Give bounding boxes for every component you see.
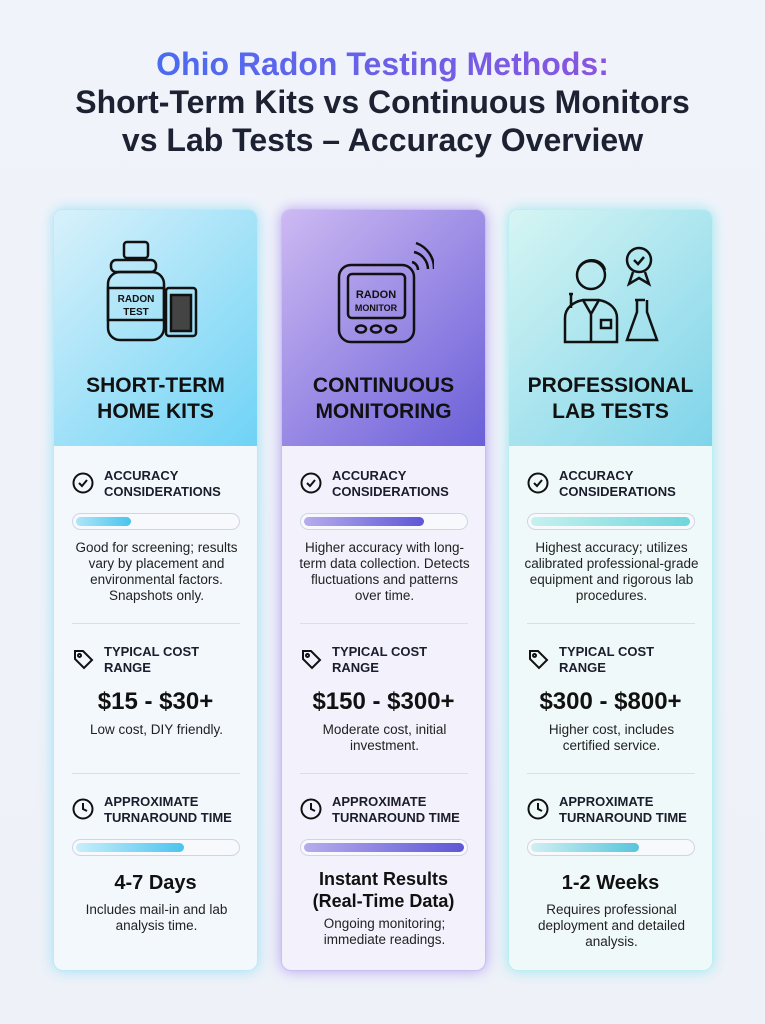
- cost section: $300 - $800+: [539, 688, 682, 715]
- turnaround section: 1-2 Weeks: [562, 872, 659, 894]
- accuracy section: Highest accuracy; utilizes calibrated professional-grade equipment and rigorous lab procedures.: [524, 540, 699, 603]
- accuracy section: CONSIDERATIONS: [559, 484, 676, 499]
- accuracy section: ACCURACY: [104, 468, 178, 483]
- turnaround section: APPROXIMATE: [559, 794, 653, 809]
- accuracy section: Good for screening; results vary by placement and environmental factors. Snapshots only.: [75, 540, 238, 603]
- turnaround section: Ongoing monitoring; immediate readings.: [324, 916, 445, 947]
- turnaround section: (Real-Time Data): [313, 891, 454, 911]
- accuracy section: CONSIDERATIONS: [104, 484, 221, 499]
- cost section: RANGE: [332, 660, 379, 675]
- icon: radon test kit: TEST: [123, 307, 149, 318]
- turnaround section: Includes mail-in and lab analysis time.: [86, 902, 227, 933]
- panel: professional lab tests: certified service.: [563, 738, 660, 753]
- title: [75, 46, 690, 158]
- turnaround section: TURNAROUND TIME: [559, 810, 687, 825]
- header: continuous: MONITORING: [315, 400, 452, 423]
- panel: short-term kits: [53, 209, 258, 971]
- header: lab: [509, 210, 712, 446]
- header: short-term: SHORT-TERM: [86, 374, 225, 397]
- header: lab: LAB TESTS: [552, 400, 669, 423]
- icon: radon monitor: RADON: [356, 289, 396, 301]
- turnaround section: TURNAROUND TIME: [104, 810, 232, 825]
- icon: radon monitor: [338, 242, 434, 344]
- title: vs Lab Tests – Accuracy Overview: [122, 122, 643, 158]
- turnaround section: [72, 794, 240, 933]
- icon: radon test kit: [106, 240, 198, 342]
- panel: professional lab tests: [508, 209, 713, 971]
- accuracy section: ACCURACY: [559, 468, 633, 483]
- cost section: TYPICAL COST: [332, 644, 427, 659]
- icon: radon test kit: RADON: [118, 294, 154, 305]
- turnaround section: Instant Results: [319, 869, 448, 889]
- title: Short-Term Kits vs Continuous Monitors: [75, 84, 690, 120]
- header: continuous: [282, 210, 485, 446]
- turnaround section: [300, 794, 468, 947]
- turnaround section: APPROXIMATE: [104, 794, 198, 809]
- cost section: Higher cost, includes: [549, 722, 674, 737]
- cost section: TYPICAL COST: [104, 644, 199, 659]
- accuracy section: ACCURACY: [332, 468, 406, 483]
- header: continuous: CONTINUOUS: [313, 374, 454, 397]
- icon: lab scientist: [564, 246, 659, 344]
- cost section: [302, 644, 455, 753]
- header: lab: PROFESSIONAL: [528, 374, 693, 397]
- turnaround section: TURNAROUND TIME: [332, 810, 460, 825]
- turnaround section: APPROXIMATE: [332, 794, 426, 809]
- cost section: RANGE: [559, 660, 606, 675]
- cost section: [529, 644, 682, 753]
- cost section: $150 - $300+: [312, 688, 455, 715]
- panel: continuous monitoring: [281, 209, 486, 971]
- cost section: TYPICAL COST: [559, 644, 654, 659]
- cost section: Moderate cost, initial investment.: [323, 722, 446, 753]
- cost section: Low cost, DIY friendly.: [90, 722, 223, 737]
- accuracy section: CONSIDERATIONS: [332, 484, 449, 499]
- header: short-term: HOME KITS: [97, 400, 214, 423]
- cost section: [74, 644, 223, 737]
- icon: radon monitor: MONITOR: [355, 303, 398, 313]
- turnaround section: [527, 794, 695, 949]
- accuracy section: [524, 468, 699, 603]
- accuracy section: [299, 468, 470, 603]
- turnaround section: Requires professional deployment and detailed analysis.: [538, 902, 685, 949]
- title: Ohio Radon Testing Methods:: [156, 46, 609, 82]
- header: short-term: [54, 210, 257, 446]
- cost section: RANGE: [104, 660, 151, 675]
- cost section: $15 - $30+: [98, 688, 213, 715]
- turnaround section: 4-7 Days: [114, 872, 197, 894]
- accuracy section: Higher accuracy with long-term data collection. Detects fluctuations and patterns over time.: [299, 540, 470, 603]
- accuracy section: [72, 468, 240, 603]
